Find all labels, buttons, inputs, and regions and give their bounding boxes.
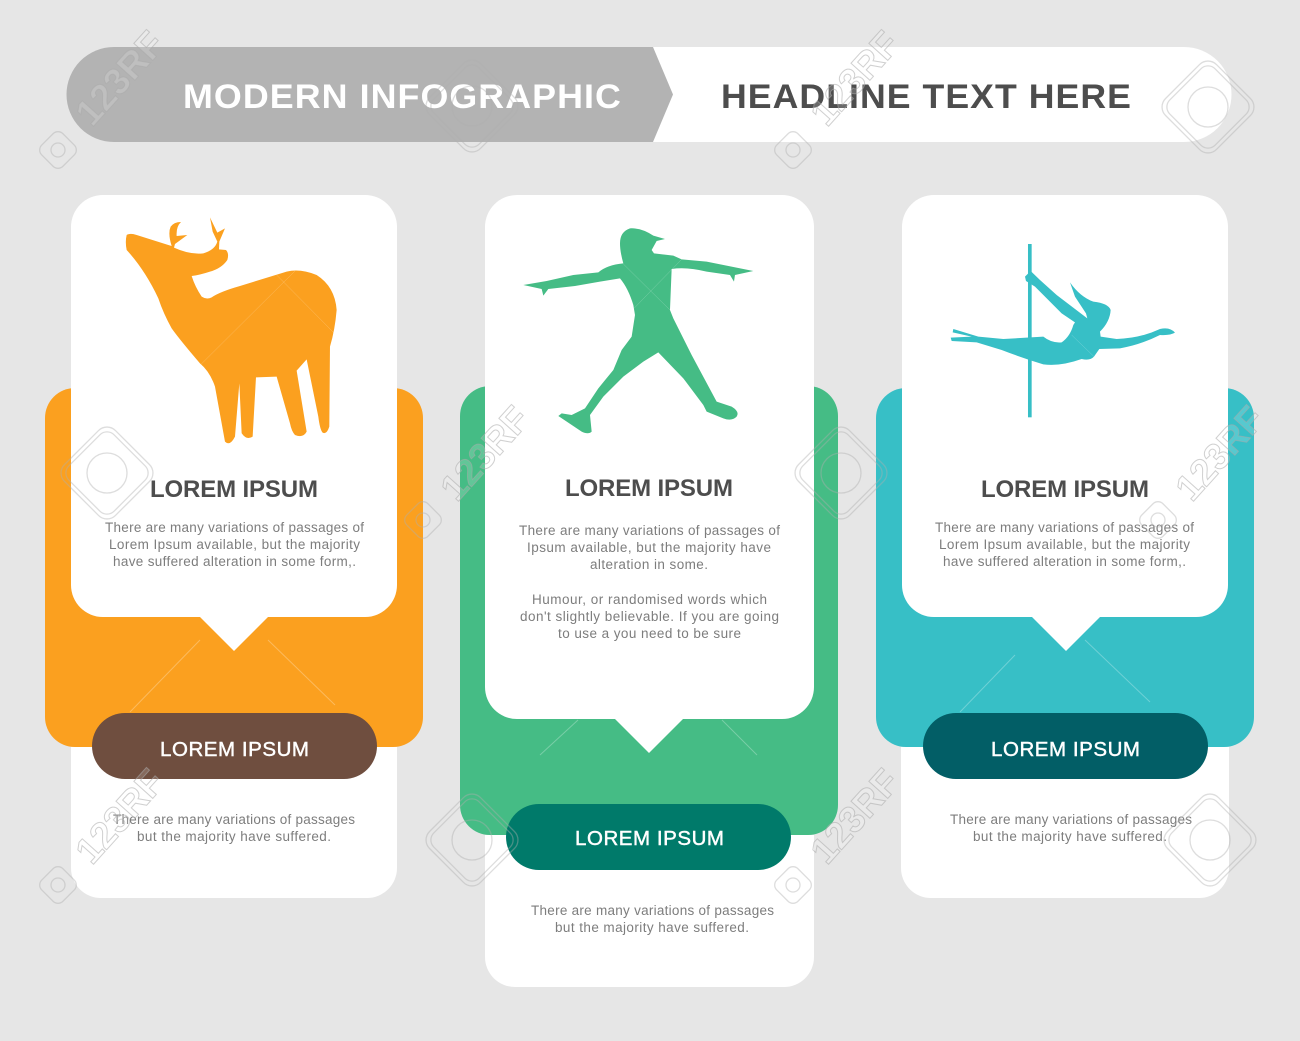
- panel: deer column: [45, 195, 423, 898]
- icon: deer: [126, 217, 337, 443]
- heading: LOREM IPSUM: [981, 476, 1149, 503]
- body text: have suffered alteration in some form,.: [113, 554, 356, 569]
- caption: There are many variations of passages: [950, 812, 1192, 827]
- pill label: [506, 804, 791, 870]
- green backing panel: [460, 386, 838, 835]
- body text: alteration in some.: [590, 557, 708, 572]
- orange backing panel: [45, 388, 423, 747]
- body text: Lorem Ipsum available, but the majority: [109, 537, 360, 552]
- teal backing panel: [876, 388, 1254, 747]
- body text: [935, 520, 1194, 569]
- lower white card: [485, 835, 814, 987]
- heading: LOREM IPSUM: [150, 476, 318, 503]
- caption: [531, 903, 774, 935]
- upper white card with pointer: [71, 195, 397, 651]
- heading: LOREM IPSUM: [565, 475, 733, 502]
- upper white card with pointer: [902, 195, 1228, 651]
- title left: MODERN INFOGRAPHIC: [183, 78, 622, 116]
- caption: There are many variations of passages: [531, 903, 774, 918]
- pill label: [923, 713, 1208, 779]
- panel: pole dancer column: [876, 195, 1254, 898]
- pill label: [92, 713, 377, 779]
- body text: have suffered alteration in some form,.: [943, 554, 1186, 569]
- body text: Ipsum available, but the majority have: [527, 540, 771, 555]
- header banner: [67, 47, 1232, 142]
- body text: [105, 520, 364, 569]
- watermarks: 123RF: [432, 398, 537, 508]
- watermarks: 123RF: [67, 761, 172, 871]
- pill label: LOREM IPSUM: [991, 738, 1140, 761]
- body text: [519, 523, 780, 641]
- body text: don't slightly believable. If you are going: [520, 609, 779, 624]
- caption: [113, 812, 355, 844]
- caption: but the majority have suffered.: [137, 829, 331, 844]
- caption: but the majority have suffered.: [973, 829, 1167, 844]
- watermarks: 123RF: [1167, 398, 1272, 508]
- body text: to use a you need to be sure: [558, 626, 741, 641]
- body text: There are many variations of passages of: [519, 523, 780, 538]
- watermarks: 123RF: [67, 23, 172, 133]
- watermarks: 123RF: [802, 23, 907, 133]
- lower white card: [901, 747, 1229, 898]
- caption: There are many variations of passages: [113, 812, 355, 827]
- body text: There are many variations of passages of: [935, 520, 1194, 535]
- icon: jumping person: [523, 228, 753, 433]
- upper white card with pointer: [485, 195, 814, 753]
- pill label: LOREM IPSUM: [160, 738, 309, 761]
- panel: jumper column: [460, 195, 838, 987]
- caption: [950, 812, 1192, 844]
- pill label: LOREM IPSUM: [575, 827, 724, 850]
- lower white card: [71, 747, 397, 898]
- icon: pole dancer: [951, 244, 1175, 417]
- body text: There are many variations of passages of: [105, 520, 364, 535]
- body text: Humour, or randomised words which: [532, 592, 767, 607]
- watermarks: 123RF: [802, 761, 907, 871]
- caption: but the majority have suffered.: [555, 920, 749, 935]
- title right: HEADLINE TEXT HERE: [721, 78, 1132, 116]
- body text: Lorem Ipsum available, but the majority: [939, 537, 1190, 552]
